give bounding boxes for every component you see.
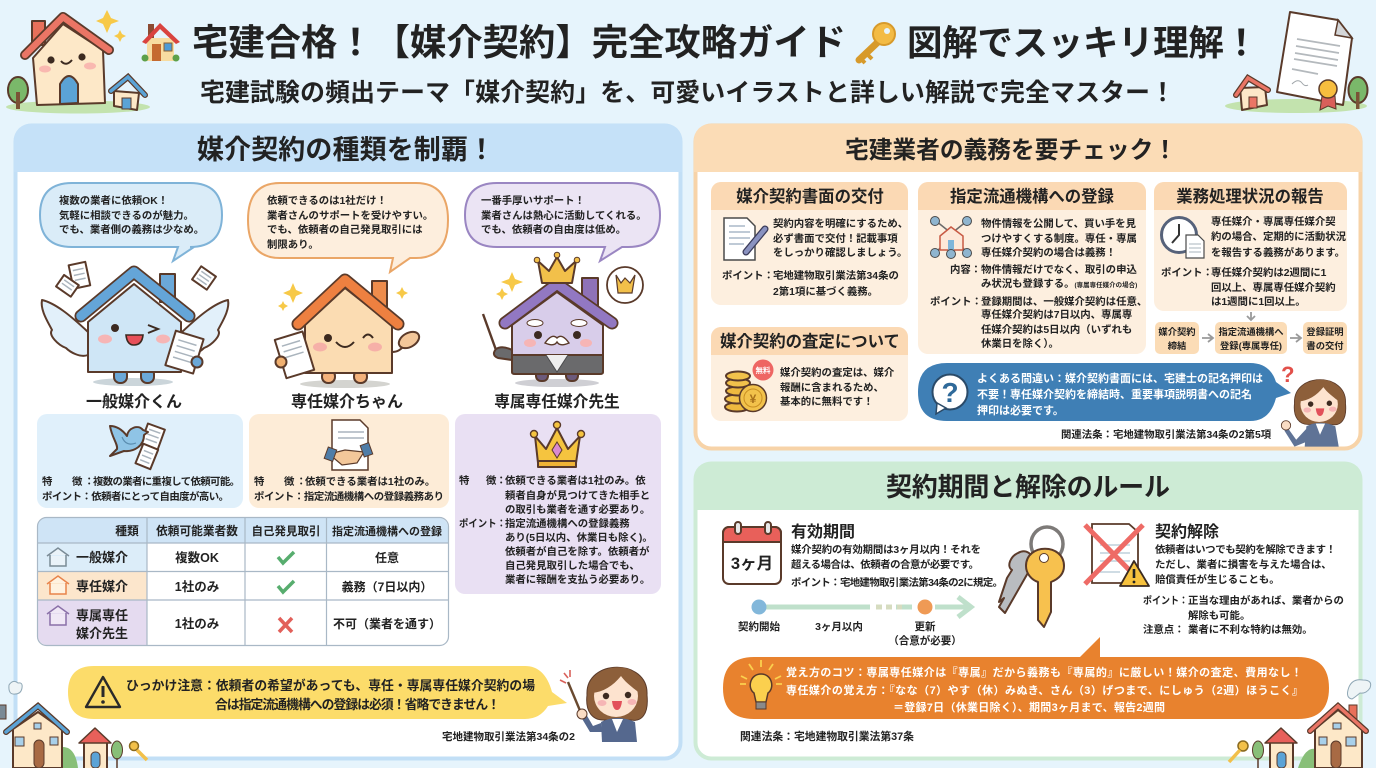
callout: trap warning: 合は指定流通機構への登録は必須！省略できません！ xyxy=(215,697,500,712)
card: delivery of contract document: ポイント： xyxy=(722,271,774,282)
card: status report: は1週間に1回以上。 xyxy=(1211,295,1306,308)
callout: common mistake xyxy=(918,363,1291,421)
mascot: orange house with document xyxy=(275,280,422,388)
comparison table: 1社のみ xyxy=(175,579,219,594)
card: status report: 専任媒介契約は2週間に1 xyxy=(1211,266,1327,279)
icon: keys xyxy=(999,527,1064,627)
callout: trap warning: ひっかけ注意：依頼者の希望があっても、専任・専属専任媒介契約の場 xyxy=(126,678,535,693)
icon: cross xyxy=(279,618,292,632)
text: validity period: 媒介契約の有効期間は3ヶ月以内！それを xyxy=(791,543,981,556)
callout: memory tips: 専任媒介の覚え方：『なな（7）やす（休）みぬき、さん（3）げつまで、にしゅう（2週）ほうこく』 xyxy=(786,683,1303,697)
card: delivery of contract document: 2第1項に基づく義務。 xyxy=(773,285,878,298)
speech bubble: general xyxy=(40,183,222,261)
subtitle: 宅建試験の頻出テーマ「媒介契約」を、可愛いイラストと詳しい解説で完全マスター！ xyxy=(200,79,1175,107)
text: cancellation: 解除も可能。 xyxy=(1188,609,1250,622)
comparison table: 媒介先生 xyxy=(76,626,128,641)
speech bubble: exclusive-dedicated xyxy=(465,183,660,261)
speech bubble: general: でも、業者側の義務は少なめ。 xyxy=(59,223,204,236)
info box: general: 特 xyxy=(42,475,53,488)
info box: exclusive-dedicated xyxy=(455,414,661,594)
text: cancellation: 賠償責任が生じることも。 xyxy=(1155,573,1280,586)
info box: exclusive-dedicated: ： xyxy=(496,476,506,487)
card: designated distribution organization: ポイント： xyxy=(930,297,982,308)
icon: coins: 無料 xyxy=(756,365,771,375)
flow: registration steps: 媒介契約 xyxy=(1158,326,1196,337)
card: designated distribution organization: 専任媒介契約は7日以内、専属専 xyxy=(981,308,1132,321)
icon: calendar 3 months xyxy=(723,522,781,584)
callout: common mistake: よくある間違い：媒介契約書面には、宅建士の記名押印は xyxy=(977,371,1263,385)
panel: types of brokerage contracts xyxy=(14,124,682,758)
text: cancellation: ポイント： xyxy=(1143,595,1188,607)
info box: exclusive-dedicated: 依頼できる業者は1社のみ。依 xyxy=(505,474,646,487)
comparison table: 義務（7日以内） xyxy=(342,579,432,594)
icon: light bulb xyxy=(740,660,782,709)
card: delivery of contract document: 宅地建物取引業法第34条の xyxy=(773,269,899,282)
info box: exclusive: 特 xyxy=(254,475,265,488)
icon: house emoji xyxy=(142,23,180,62)
comparison table: 任意 xyxy=(375,550,399,565)
comparison table: 複数OK xyxy=(175,550,219,565)
info box: general: ポイント：依頼者にとって自由度が高い。 xyxy=(42,490,229,503)
comparison table: 自己発見取引 xyxy=(252,524,320,538)
info box: exclusive-dedicated: の取引も業者を通す必要あり。 xyxy=(505,503,650,516)
card: designated distribution organization: 専任媒介契約の場合は義務！ xyxy=(981,246,1116,259)
panel: agent obligations xyxy=(694,124,1362,448)
info box: exclusive-dedicated: 徴 xyxy=(486,474,497,487)
comparison table: 種類 xyxy=(115,524,139,538)
card: brokerage appraisal xyxy=(711,327,908,421)
timeline: contract period: 3ヶ月以内 xyxy=(815,620,863,633)
info box: exclusive: ： xyxy=(296,477,306,488)
illustration: woman with question mark xyxy=(1281,362,1346,447)
icon: warning triangle xyxy=(86,677,120,707)
icon: crown xyxy=(530,422,584,467)
text: validity period: 有効期間 xyxy=(791,523,855,541)
icon: document and pen xyxy=(724,218,765,260)
panel heading: 媒介契約の種類を制覇！ xyxy=(197,135,495,165)
panel heading: 宅建業者の義務を要チェック！ xyxy=(845,137,1177,164)
card: brokerage appraisal: 媒介契約の査定は、媒介 xyxy=(780,366,895,379)
info box: exclusive: 依頼できる業者は1社のみ。 xyxy=(305,475,435,488)
text: cancellation: ただし、業者に損害を与えた場合は、 xyxy=(1155,558,1332,571)
mascot names: 専属専任媒介先生 xyxy=(494,392,620,411)
comparison table: 不可（業者を通す） xyxy=(333,616,441,631)
mascot: purple house teacher with crown xyxy=(483,252,643,387)
text: validity period: ポイント：宅地建物取引業法第34条の2に規定。 xyxy=(791,576,1003,589)
mascot names: 一般媒介くん xyxy=(86,393,182,411)
info box: exclusive-dedicated: 自己発見取引した場合でも、 xyxy=(505,559,640,572)
icon: calendar 3 months: 3ヶ月 xyxy=(731,555,773,573)
comparison table: 指定流通機構への登録 xyxy=(332,524,442,538)
card: brokerage appraisal: 報酬に含まれるため、 xyxy=(780,381,884,394)
speech bubble: exclusive-dedicated: 一番手厚いサポート！ xyxy=(481,194,585,207)
info box: exclusive xyxy=(249,414,449,508)
text: cancellation: 正当な理由があれば、業者からの xyxy=(1188,594,1344,607)
comparison table: 1社のみ xyxy=(175,616,219,631)
header illustration: contract document and house xyxy=(1225,12,1368,113)
speech bubble: exclusive-dedicated: 業者さんは熱心に活動してくれる。 xyxy=(481,209,647,222)
icon: coins: ¥ xyxy=(750,392,757,406)
flow: registration steps xyxy=(1155,312,1347,354)
title xyxy=(192,22,1259,63)
card: designated distribution organization: み状況も登録する。(専属専任媒介の場合) xyxy=(981,277,1137,290)
legal reference: 関連法条：宅地建物取引業法第34条の2第5項 xyxy=(1061,428,1272,441)
icon: coins xyxy=(725,360,774,412)
card: status report: ポイント： xyxy=(1161,268,1213,279)
card: designated distribution organization: 休業日を除く）。 xyxy=(981,337,1059,350)
info box: exclusive-dedicated: 指定流通機構への登録義務 xyxy=(505,517,630,530)
card: status report: 専任媒介・専属専任媒介契 xyxy=(1211,215,1336,228)
title: 宅建合格！【媒介契約】完全攻略ガイド xyxy=(192,22,846,63)
icon: crossed-out document with warning xyxy=(1085,524,1149,586)
comparison table xyxy=(37,518,448,646)
flow: registration steps: 締結 xyxy=(1168,340,1186,351)
callout: memory tips: 覚え方のコツ：専属専任媒介は『専属』だから義務も『専属的』に厳しい！媒介の査定、費用なし！ xyxy=(786,665,1302,679)
comparison table: 依頼可能業者数 xyxy=(156,524,238,538)
info box: exclusive-dedicated: ポイント： xyxy=(459,518,506,530)
card: delivery of contract document: 媒介契約書面の交付 xyxy=(736,187,884,206)
icon: key xyxy=(859,23,895,63)
illustration: teacher woman with pointer xyxy=(560,667,647,742)
icon: table house blue xyxy=(47,548,69,566)
card: brokerage appraisal: 媒介契約の査定について xyxy=(720,332,900,351)
card: designated distribution organization: 指定流通機構への登録 xyxy=(950,187,1115,206)
timeline: contract period: 契約開始 xyxy=(738,620,780,633)
card: delivery of contract document: をしっかり確認しましょう。 xyxy=(773,246,907,259)
text: cancellation xyxy=(1143,522,1344,636)
comparison table: 一般媒介 xyxy=(76,550,128,565)
card: designated distribution organization: 物件情報だけでなく、取引の申込 xyxy=(981,263,1137,276)
text: cancellation: 契約解除 xyxy=(1155,522,1219,541)
speech bubble: exclusive: 制限あり。 xyxy=(267,238,319,251)
speech bubble: general: 複数の業者に依頼OK！ xyxy=(59,194,168,207)
info box: exclusive-dedicated: あり(5日以内、休業日も除く)。 xyxy=(505,531,653,544)
arrow: right xyxy=(1202,334,1213,342)
callout: common mistake: 押印は必要です。 xyxy=(977,403,1064,417)
info box: exclusive-dedicated: 業者に報酬を支払う必要あり。 xyxy=(505,573,650,586)
icon: bird with documents xyxy=(110,424,165,469)
panel: contract period and cancellation xyxy=(694,462,1362,758)
title: 図解でスッキリ理解！ xyxy=(907,23,1259,63)
card: status report: 業務処理状況の報告 xyxy=(1176,188,1324,206)
flow: registration steps: 登録(専属専任) xyxy=(1220,340,1282,351)
speech bubble: exclusive xyxy=(248,183,448,272)
arrow: down xyxy=(1247,312,1255,320)
icon: table house purple xyxy=(47,606,69,625)
speech bubble: exclusive: 依頼できるのは1社だけ！ xyxy=(267,194,387,207)
header illustration: smiling house xyxy=(6,10,150,114)
mascot names: 専任媒介ちゃん xyxy=(291,392,403,411)
text: cancellation: 注意点： xyxy=(1143,625,1185,636)
icon: question speech bubble: ? xyxy=(941,377,959,408)
timeline: contract period xyxy=(738,597,971,647)
flow: registration steps: 指定流通機構へ xyxy=(1218,326,1284,337)
card: designated distribution organization: 登録期間は、一般媒介契約は任意、 xyxy=(981,295,1147,308)
card: status report: 回以上、専属専任媒介契約 xyxy=(1211,281,1336,294)
comparison table: 専属専任 xyxy=(76,608,128,623)
text: cancellation: 依頼者はいつでも契約を解除できます！ xyxy=(1155,543,1336,556)
scenery: bottom-left houses xyxy=(0,681,147,768)
icon: handshake over document xyxy=(324,420,373,470)
text: validity period: 超える場合は、依頼者の合意が必要です。 xyxy=(791,558,979,571)
info box: general: 徴 xyxy=(72,475,83,488)
card: status report: 約の場合、定期的に活動状況 xyxy=(1211,230,1347,243)
mascot: blue house with wings xyxy=(42,262,228,386)
card: designated distribution organization: 任媒介契約は5日以内（いずれも xyxy=(981,323,1132,336)
icon: table house orange xyxy=(47,576,69,594)
card: brokerage appraisal: 基本的に無料です！ xyxy=(780,395,874,408)
icon: check xyxy=(278,581,294,592)
icon: clock and paper xyxy=(1162,218,1204,258)
callout: common mistake: 不要！専任媒介契約を締結時、重要事項説明書への記名 xyxy=(977,387,1252,401)
panel heading: 契約期間と解除のルール xyxy=(886,472,1170,502)
speech bubble: exclusive: でも、依頼者の自己発見取引には xyxy=(267,223,423,236)
speech bubble: exclusive-dedicated: でも、依頼者の自由度は低め。 xyxy=(481,223,626,236)
icon: check xyxy=(278,552,294,563)
card: delivery of contract document xyxy=(711,182,908,305)
mascot names xyxy=(86,392,620,411)
scenery: bottom-right houses xyxy=(1229,680,1371,768)
callout: memory tips: ＝登録7日（休業日除く）、期間3ヶ月まで、報告2週間 xyxy=(893,700,1165,714)
card: designated distribution organization: 物件情報を公開して、買い手を見 xyxy=(981,217,1137,230)
card: designated distribution organization xyxy=(918,182,1147,354)
timeline: contract period: 更新 xyxy=(914,620,936,633)
card: designated distribution organization: 内容： xyxy=(950,265,981,276)
info box: general: ： xyxy=(84,477,94,488)
text: cancellation: 業者に不利な特約は無効。 xyxy=(1188,623,1313,636)
card: designated distribution organization: つけやすくする制度。専任・専属 xyxy=(981,232,1137,245)
info box: exclusive-dedicated: 特 xyxy=(459,474,470,487)
info box: general: 複数の業者に重複して依頼可能。 xyxy=(93,475,240,488)
illustration: woman with question mark: ? xyxy=(1281,362,1294,387)
callout: memory tips xyxy=(723,637,1329,719)
card: status report: を報告する義務があります。 xyxy=(1211,246,1345,259)
icon: question speech bubble xyxy=(932,374,968,414)
speech bubble: exclusive: 業者さんのサポートを受けやすい。 xyxy=(267,209,433,222)
info box: exclusive: ポイント：指定流通機構への登録義務あり xyxy=(254,490,444,503)
info box: exclusive-dedicated: 依頼者が自己を除す。依頼者が xyxy=(505,545,650,558)
card: delivery of contract document: 必ず書面で交付！記載事項 xyxy=(773,232,898,245)
arrow: right xyxy=(1290,334,1301,342)
flow: registration steps: 登録証明 xyxy=(1306,326,1344,337)
info box: general xyxy=(37,414,243,508)
comparison table: 専任媒介 xyxy=(76,579,128,594)
flow: registration steps: 書の交付 xyxy=(1306,340,1344,351)
card: delivery of contract document: 契約内容を明確にするため、 xyxy=(773,217,908,230)
timeline: contract period: （合意が必要） xyxy=(888,634,962,647)
legal reference: 宅地建物取引業法第34条の2 xyxy=(442,730,575,743)
text: validity period xyxy=(791,523,1003,589)
info box: exclusive-dedicated: 頼者自身が見つけてきた相手と xyxy=(505,489,650,502)
icon: network house xyxy=(930,216,972,258)
speech bubble: general: 気軽に相談できるのが魅力。 xyxy=(59,209,194,222)
info box: exclusive: 徴 xyxy=(284,475,295,488)
legal reference: 関連法条：宅地建物取引業法第37条 xyxy=(740,729,914,743)
card: status report xyxy=(1154,182,1347,311)
callout: trap warning xyxy=(68,666,567,719)
